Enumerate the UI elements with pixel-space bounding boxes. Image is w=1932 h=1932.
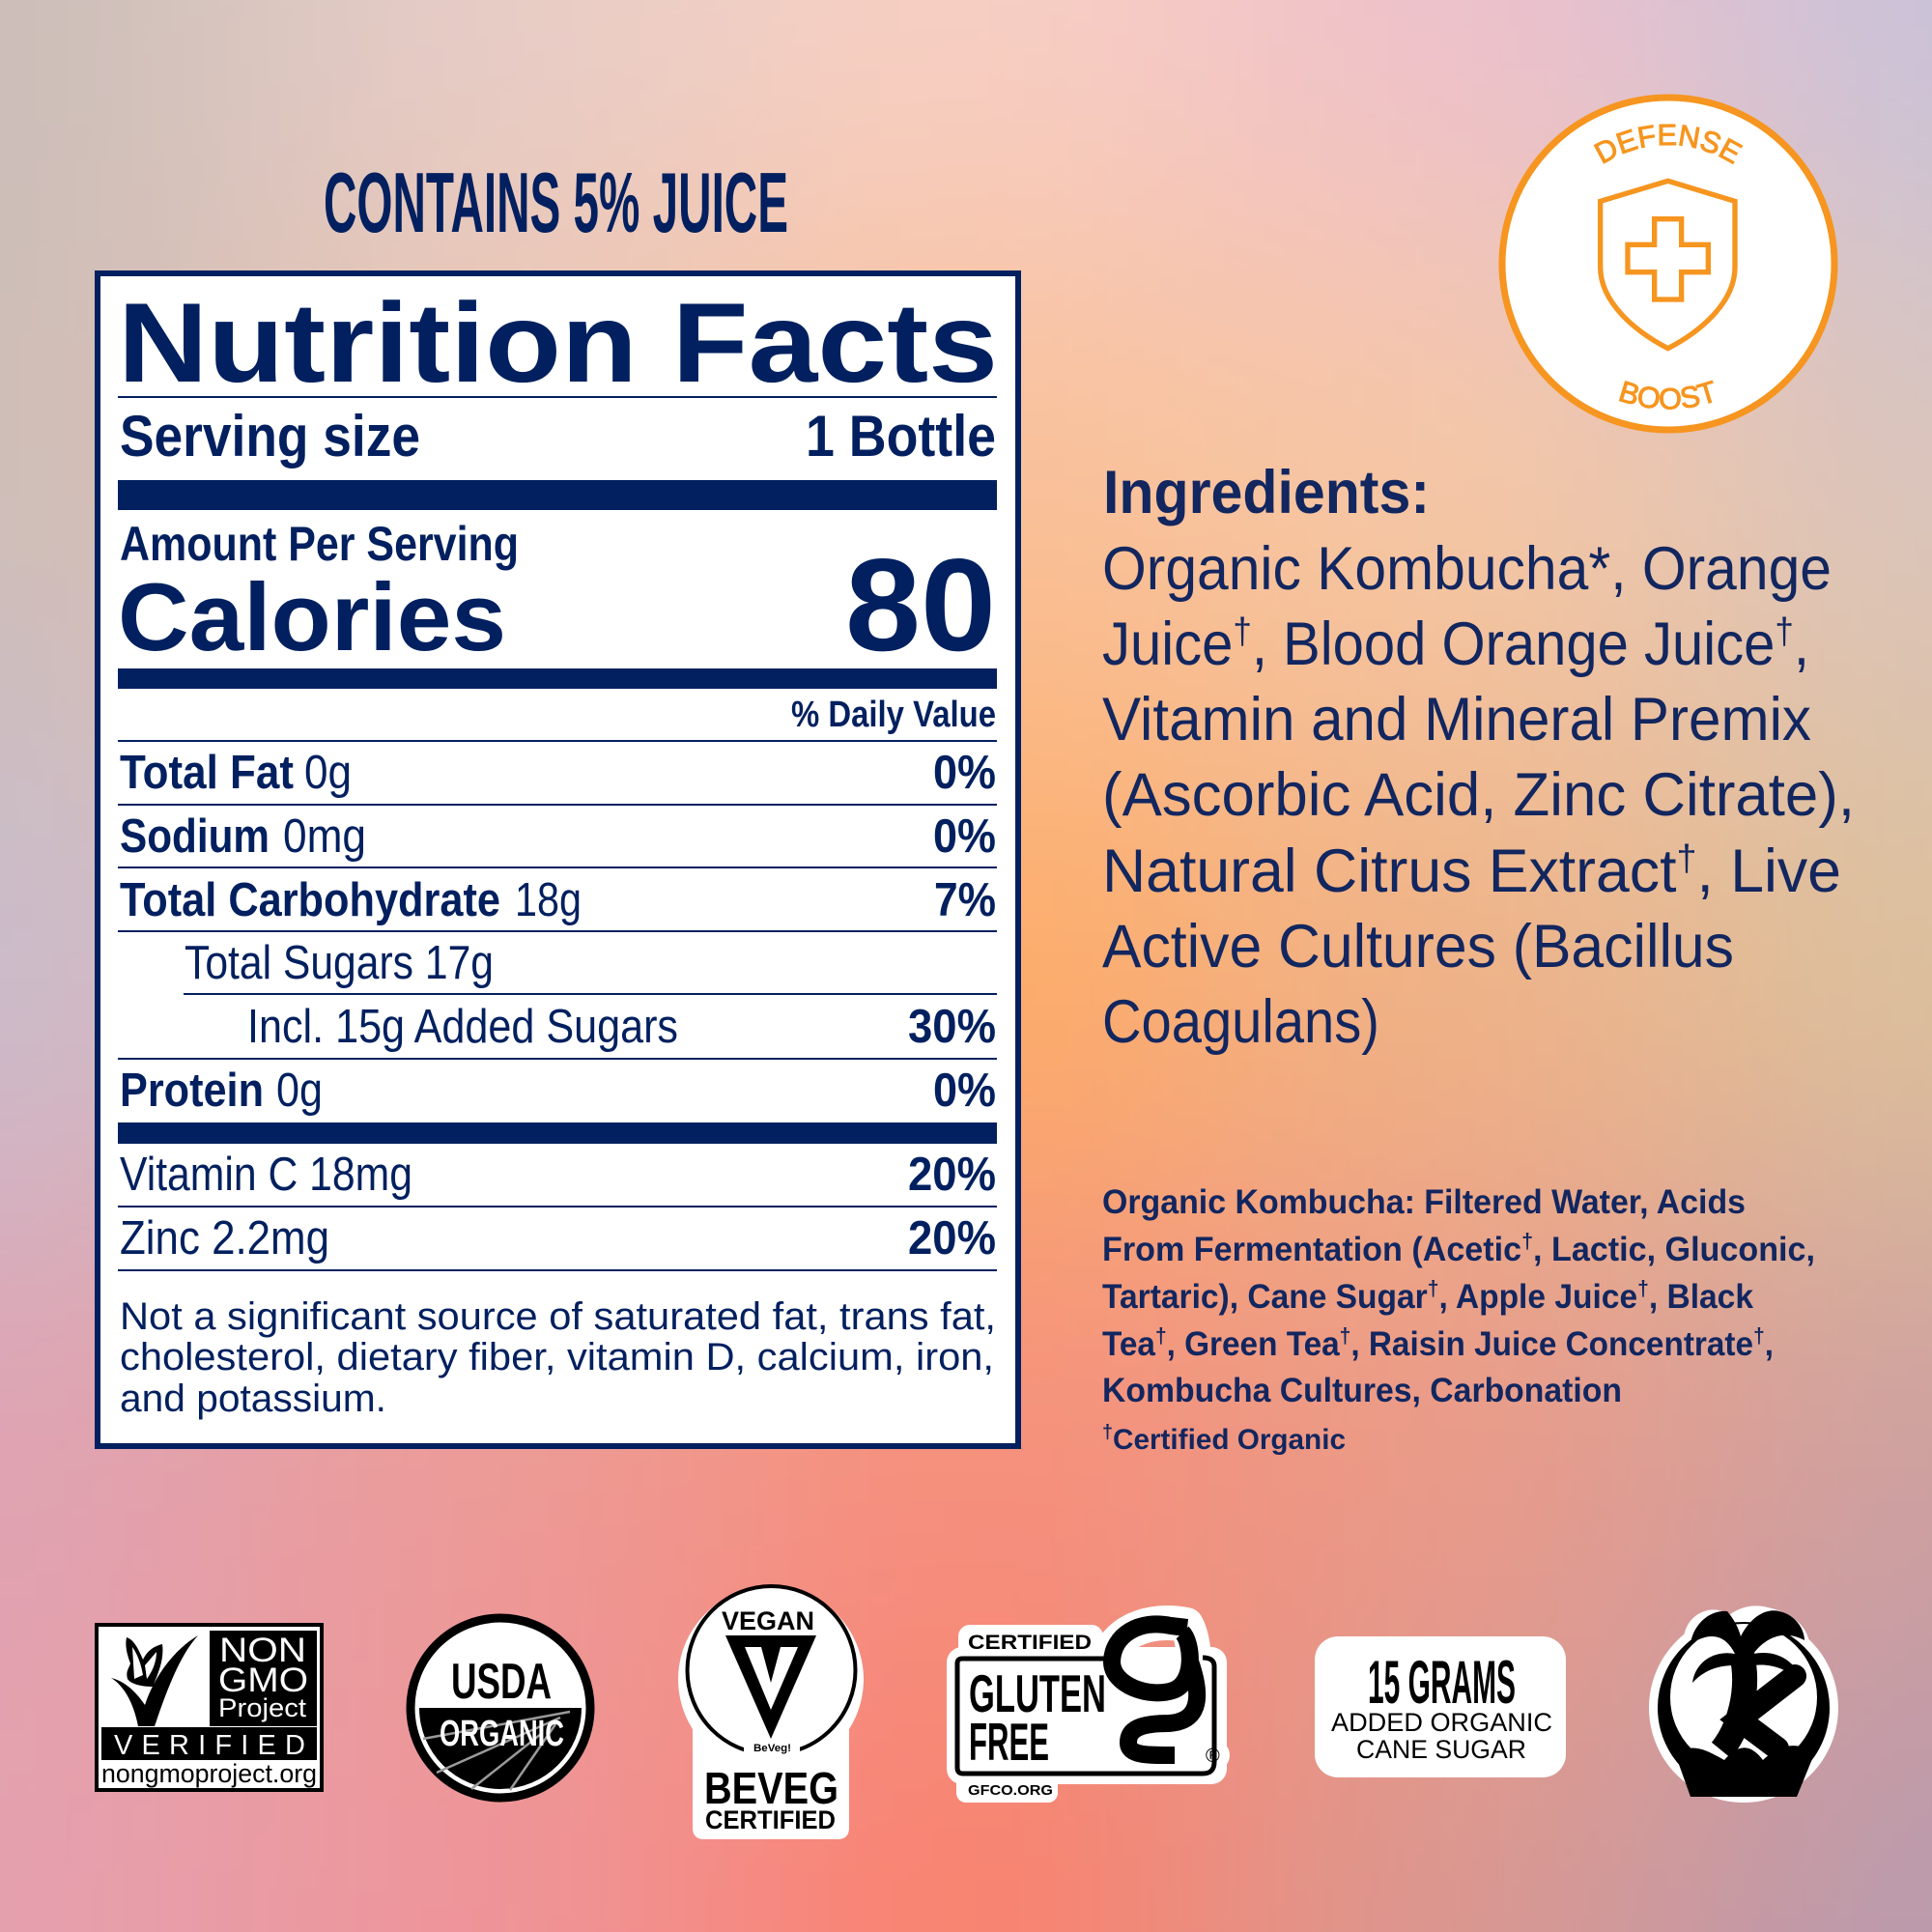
row: protein: Protein (120, 1065, 264, 1117)
kombucha sub-ingredients: , Black (1649, 1278, 1753, 1316)
row: total carbohydrate (120, 874, 996, 926)
gluten free frame (957, 1658, 1214, 1774)
kombucha sub-ingredients: † (1521, 1229, 1533, 1253)
ingredients list: , (1794, 611, 1809, 678)
row: zinc: Zinc 2.2mg (120, 1212, 329, 1264)
kombucha sub-ingredients: † (1753, 1323, 1765, 1348)
ingredients list: , Blood Orange Juice (1252, 611, 1775, 678)
ingredients list: † (1775, 611, 1794, 652)
serving size row: Serving size (120, 404, 420, 469)
added organic text: ADDED ORGANIC (1331, 1708, 1552, 1737)
logo: usda organic (411, 1618, 590, 1798)
logo: 15 grams added organic cane sugar (1315, 1636, 1566, 1777)
row: total fat: Total Fat (120, 747, 294, 799)
amount per serving: Amount Per Serving (120, 517, 519, 571)
beveg small text: BeVeg! (753, 1743, 791, 1754)
vegan text: VEGAN (722, 1606, 814, 1635)
row: sodium (120, 810, 996, 863)
row: zinc: 20% (908, 1212, 996, 1264)
ingredients heading: Ingredients: (1103, 459, 1430, 526)
usda text: USDA (451, 1654, 552, 1710)
ingredients list: † (1676, 838, 1696, 879)
island (1676, 1746, 1814, 1797)
big g (1112, 1624, 1197, 1755)
logo: 15 grams added organic cane sugar: 15 GRAMS (1368, 1649, 1516, 1717)
shield icon (1601, 181, 1735, 349)
logo: beveg vegan certified (678, 1586, 864, 1839)
kombucha sub-ingredients: , (1765, 1325, 1774, 1363)
logo: non gmo project: Project (218, 1693, 307, 1722)
kombucha sub-ingredients: , Lactic, Gluconic, (1533, 1231, 1815, 1268)
row: total sugars: Total Sugars 17g (185, 937, 494, 989)
kombucha sub-ingredients: † (1340, 1323, 1350, 1348)
heading: contains 5% juice: CONTAINS 5% JUICE (324, 155, 788, 250)
non gmo text: NON (219, 1632, 306, 1669)
logo: gluten free (947, 1623, 1230, 1803)
kombucha sub-ingredients: † (1155, 1323, 1167, 1348)
kombucha sub-ingredients: From Fermentation (Acetic (1102, 1231, 1532, 1268)
row: sodium: Sodium (120, 810, 270, 863)
row: vitamin c: Vitamin C 18mg (120, 1149, 412, 1201)
registered mark: ® (1206, 1746, 1220, 1767)
kombucha sub-ingredients: , Apple Juice (1438, 1278, 1637, 1316)
beveg wordmark: BEVEG (704, 1763, 838, 1813)
row: vitamin c: 20% (908, 1149, 996, 1201)
palm trunk k (1721, 1654, 1745, 1750)
kombucha sub-ingredients: Tartaric), Cane Sugar (1102, 1278, 1441, 1316)
row: total carbohydrate: 18g (515, 874, 582, 926)
ingredients list: (Ascorbic Acid, Zinc Citrate), (1102, 761, 1855, 829)
footnote: Not a significant source of saturated fat, trans fat, (120, 1295, 996, 1338)
gfco text: GFCO.ORG (968, 1782, 1053, 1799)
logo: non gmo project: GMO (218, 1662, 308, 1699)
free text: FREE (969, 1712, 1049, 1772)
ingredients list (1102, 535, 1855, 1056)
ingredients list: Active Cultures (Bacillus (1102, 913, 1734, 980)
row: added sugars: 30% (908, 1001, 996, 1053)
footnote (120, 1295, 996, 1420)
logo: kosher palm k (1649, 1605, 1838, 1803)
row: added sugars (247, 1001, 996, 1053)
serving size row (120, 404, 996, 469)
footnote: and potassium. (120, 1378, 386, 1420)
kombucha sub-ingredients: Organic Kombucha: Filtered Water, Acids (1102, 1183, 1746, 1221)
row: total fat: 0% (933, 747, 996, 799)
kombucha sub-ingredients (1102, 1183, 1815, 1409)
url text: nongmoproject.org (101, 1759, 317, 1788)
v triangle (725, 1635, 816, 1739)
panel: nutrition facts (98, 273, 1018, 1446)
kombucha sub-ingredients: Tea (1102, 1325, 1158, 1363)
row: total carbohydrate: Total Carbohydrate (120, 874, 500, 926)
kombucha sub-ingredients: , Raisin Juice Concentrate (1350, 1325, 1753, 1363)
row: total fat: 0g (304, 747, 352, 799)
logo: non gmo project (97, 1625, 322, 1790)
row: sodium: 0% (933, 810, 996, 863)
boost arc text: BOOST (1619, 381, 1714, 410)
cane sugar text: CANE SUGAR (1356, 1735, 1526, 1764)
certified organic note: Certified Organic (1113, 1424, 1346, 1456)
row: zinc (120, 1212, 996, 1264)
row: total fat (120, 747, 996, 799)
certified organic note: † (1102, 1422, 1113, 1443)
defense arc text: DEFENSE (1594, 124, 1743, 164)
ingredients list: , Live (1696, 838, 1841, 905)
certified text: CERTIFIED (968, 1632, 1092, 1654)
palm leaves (1690, 1610, 1804, 1683)
badge: defense boost (1499, 95, 1837, 433)
ingredients list: † (1233, 611, 1252, 652)
nutrition facts title: Nutrition Facts (118, 279, 998, 406)
footnote: cholesterol, dietary fiber, vitamin D, calcium, iron, (120, 1336, 994, 1378)
row: protein (120, 1065, 996, 1117)
plant and butterfly icon (111, 1635, 198, 1726)
panel box (98, 273, 1018, 1446)
calories value: 80 (845, 531, 996, 678)
calories label: Calories (118, 563, 506, 670)
certified text: CERTIFIED (705, 1805, 836, 1834)
ingredients list: Natural Citrus Extract (1102, 838, 1681, 905)
row: sodium: 0mg (283, 810, 366, 863)
field rays (423, 1712, 570, 1790)
daily value header: % Daily Value (791, 695, 996, 735)
ingredients list: Coagulans) (1102, 988, 1379, 1056)
kombucha sub-ingredients: , Green Tea (1167, 1325, 1340, 1363)
gluten text: GLUTEN (969, 1663, 1106, 1723)
row: protein: 0% (933, 1065, 996, 1117)
ingredients list: Vitamin and Mineral Premix (1102, 686, 1811, 753)
ingredients list: Juice (1102, 611, 1244, 678)
row: protein: 0g (276, 1065, 323, 1117)
row: added sugars: Incl. 15g Added Sugars (247, 1001, 678, 1053)
cross icon (1628, 219, 1708, 299)
kombucha sub-ingredients: † (1637, 1276, 1649, 1300)
serving size row: 1 Bottle (806, 404, 996, 469)
row: vitamin c (120, 1149, 996, 1201)
verified text: VERIFIED (114, 1730, 305, 1761)
organic text: ORGANIC (440, 1714, 564, 1754)
kombucha sub-ingredients: Kombucha Cultures, Carbonation (1102, 1372, 1622, 1409)
ingredients list: Organic Kombucha*, Orange (1102, 535, 1832, 603)
row: total carbohydrate: 7% (934, 874, 996, 926)
kombucha sub-ingredients: † (1428, 1276, 1438, 1300)
